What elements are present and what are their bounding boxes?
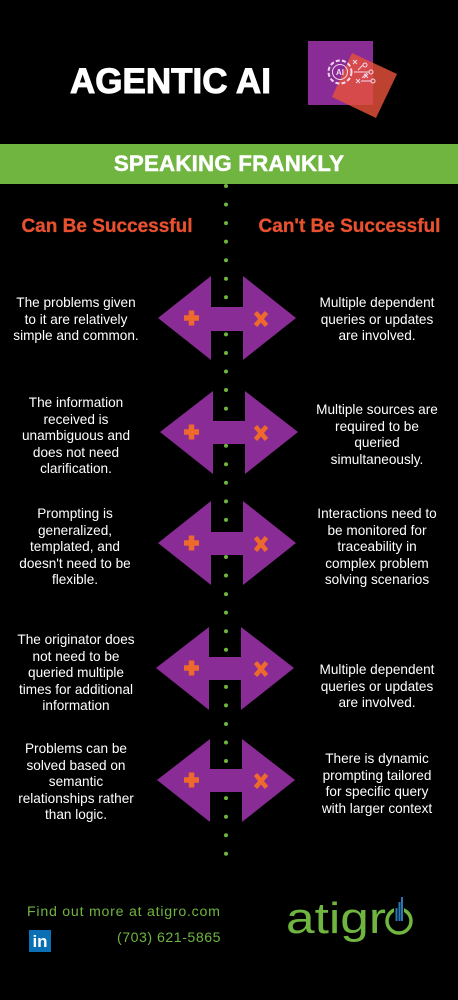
right text 3: complex problem (325, 556, 429, 571)
left text 5 (18, 741, 134, 822)
right text 3: solving scenarios (325, 572, 429, 587)
left text 4 (17, 632, 135, 713)
right text 2: Multiple sources are (316, 402, 438, 417)
left text 3: templated, and (30, 539, 120, 554)
left text 4: information (42, 698, 110, 713)
right text 5 (322, 751, 432, 816)
left text 4: not need to be (33, 649, 119, 664)
left text 3: Prompting is (37, 506, 113, 521)
arrow 5 (157, 739, 295, 822)
left text 2: clarification. (40, 461, 112, 476)
banner (0, 144, 458, 184)
arrow 3 (158, 501, 296, 585)
left text 1: simple and common. (13, 328, 139, 343)
left text 5: relationships rather (18, 791, 134, 806)
right text 5: for specific query (326, 784, 428, 799)
arrow 4 (156, 627, 294, 710)
right text 2: required to be (335, 419, 419, 434)
right text 5: with larger context (322, 801, 432, 816)
right text 1: queries or updates (321, 312, 433, 327)
left text 4: queried multiple (28, 665, 124, 680)
left text 4: times for additional (19, 682, 133, 697)
right text 2 (316, 402, 438, 467)
arrow 1 (158, 276, 296, 360)
icon: agentic AI logo (308, 41, 397, 118)
right text 1 (320, 295, 434, 343)
left text 5: solved based on (26, 758, 126, 773)
left text 5: than logic. (45, 807, 107, 822)
left text 3: flexible. (52, 572, 98, 587)
icon: linkedin: in (32, 932, 48, 951)
arrow 2 (160, 391, 298, 474)
left text 4: The originator does (17, 632, 135, 647)
right text 1: are involved. (338, 328, 416, 343)
banner heading: SPEAKING FRANKLY (114, 151, 344, 176)
left text 2: does not need (33, 445, 119, 460)
left text 2: unambiguous and (22, 428, 130, 443)
left text 1: The problems given (16, 295, 136, 310)
left text 5: Problems can be (25, 741, 127, 756)
left text 3: doesn't need to be (19, 556, 131, 571)
right text 1: Multiple dependent (320, 295, 434, 310)
right text 2: simultaneously. (331, 452, 423, 467)
left text 3 (19, 506, 131, 587)
left text 3: generalized, (38, 523, 112, 538)
right text 4: Multiple dependent (320, 662, 434, 677)
right text 3: be monitored for (328, 523, 426, 538)
phone number: (703) 621-5865 (117, 930, 221, 946)
right text 5: There is dynamic (325, 751, 429, 766)
left text 1 (13, 295, 139, 343)
heading: can't be successful: Can't Be Successful (259, 216, 440, 237)
left text 1: to it are relatively (25, 312, 127, 327)
icon: linkedin (29, 930, 51, 952)
atigro logo: atigr (286, 894, 386, 943)
right text 3: traceability in (337, 539, 417, 554)
right text 4: queries or updates (321, 679, 433, 694)
right text 4 (320, 662, 434, 710)
left text 2: The information (29, 395, 123, 410)
atigro logo (286, 894, 413, 943)
right text 2: queried (354, 435, 400, 450)
left text 2: received is (44, 412, 108, 427)
title: AGENTIC AI (70, 62, 271, 101)
footer link text: Find out more at atigro.com (27, 904, 221, 920)
right text 4: are involved. (338, 695, 416, 710)
right text 5: prompting tailored (323, 768, 431, 783)
left text 5: semantic (49, 774, 103, 789)
right text 3 (317, 506, 437, 587)
heading: can be successful: Can Be Successful (21, 216, 193, 237)
icon: agentic AI logo: AI (336, 68, 344, 77)
left text 2 (22, 395, 130, 476)
right text 3: Interactions need to (317, 506, 437, 521)
